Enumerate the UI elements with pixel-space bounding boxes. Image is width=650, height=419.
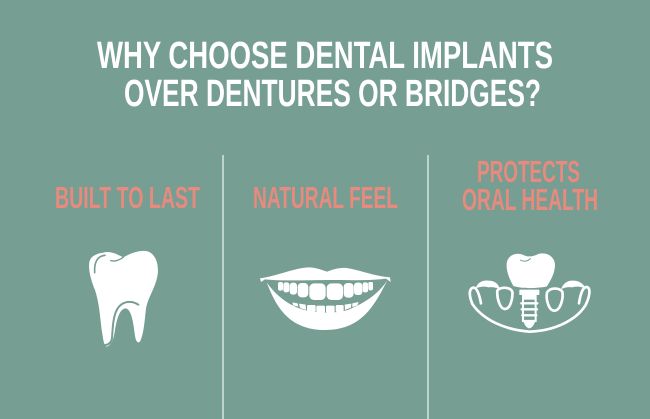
crown (507, 253, 555, 288)
upper lip (260, 267, 391, 282)
implant screw (519, 290, 539, 328)
icon: dental implant (470, 253, 589, 332)
neighbouring tooth tops (476, 281, 586, 289)
heading: protects oral health (462, 154, 598, 217)
lower lip (267, 281, 387, 330)
icon: smile (260, 267, 391, 330)
heading: built to last: BUILT TO LAST (55, 180, 200, 215)
jaw and neighbouring teeth (470, 287, 589, 332)
heading: natural feel: NATURAL FEEL (253, 180, 398, 215)
title (97, 35, 553, 115)
lower teeth (292, 302, 359, 313)
icon: tooth (89, 251, 158, 347)
upper teeth (278, 282, 373, 300)
heading: protects oral health: PROTECTS (477, 154, 580, 189)
